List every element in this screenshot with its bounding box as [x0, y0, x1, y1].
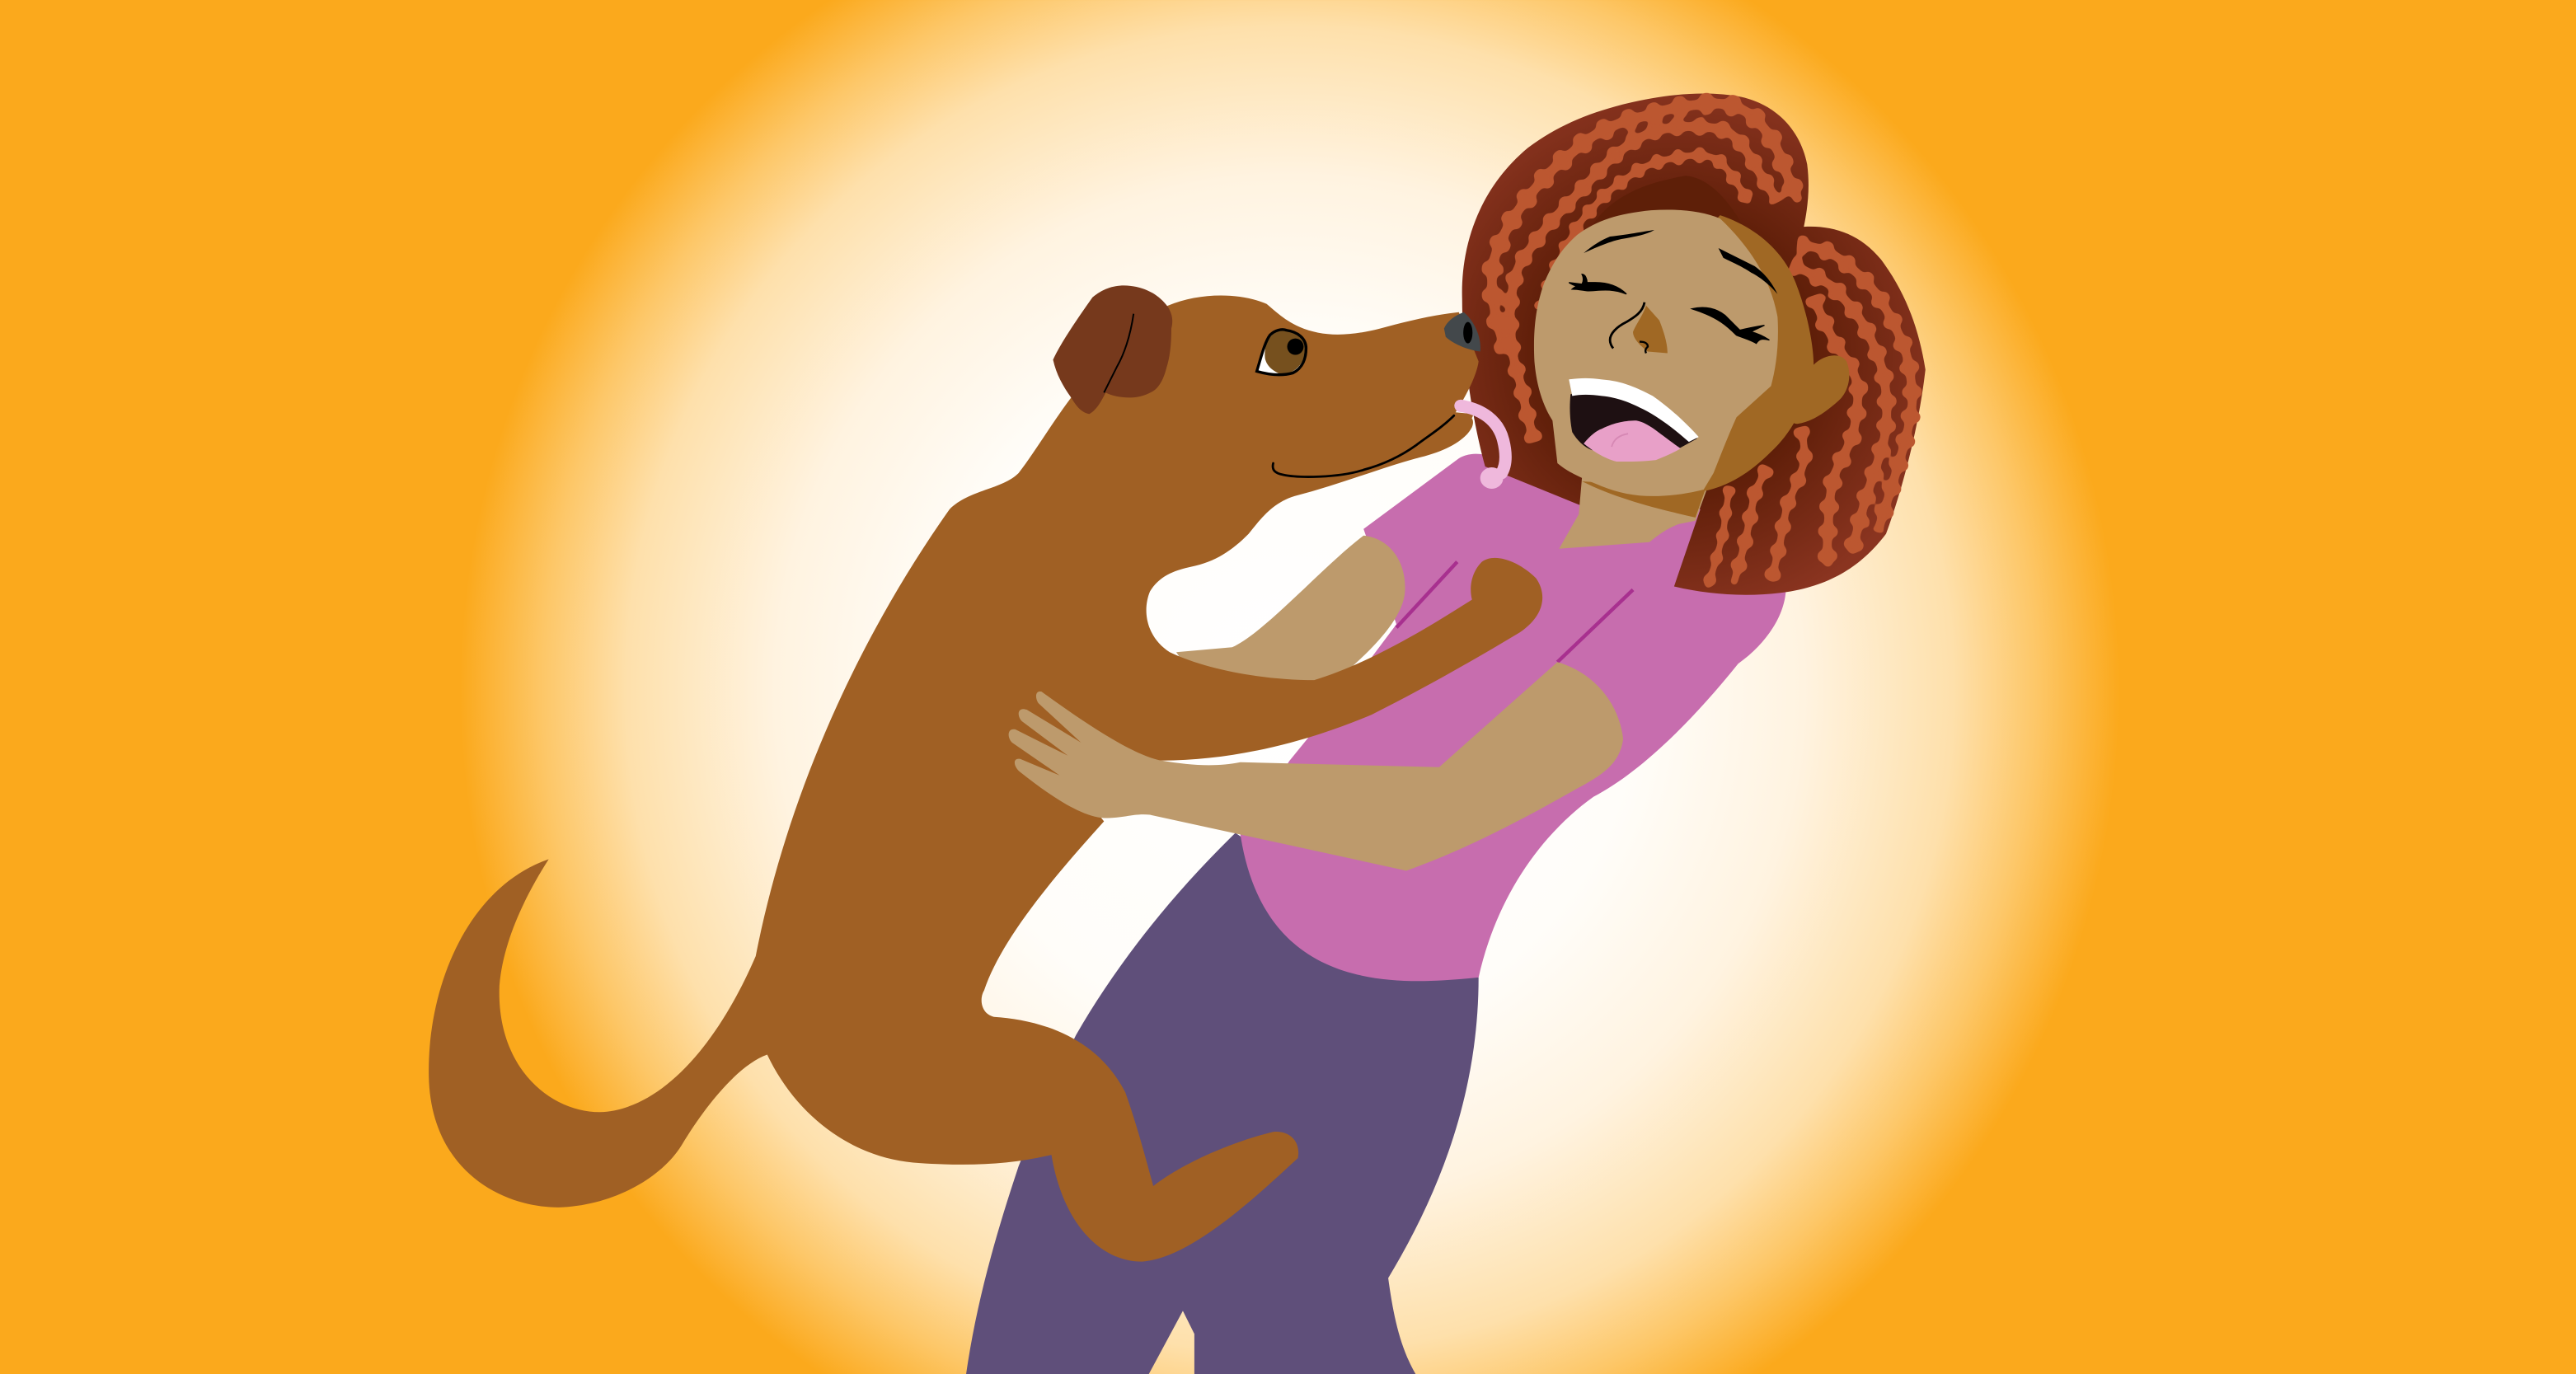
left eyebrow	[1584, 230, 1654, 253]
open mouth	[1569, 378, 1699, 462]
braid strand middle top	[1510, 126, 1777, 442]
eye white	[1257, 330, 1306, 375]
tongue tip	[1480, 467, 1504, 489]
nostril	[1640, 342, 1648, 354]
nose crease	[1610, 302, 1645, 349]
woman: purple trousers	[966, 832, 1479, 1374]
dog nose	[1444, 312, 1480, 352]
shirt fold line right	[1557, 590, 1633, 662]
braid strands right lobe	[1707, 245, 1912, 589]
dog ear	[1053, 285, 1172, 414]
iris	[1265, 331, 1306, 374]
left closed eye	[1569, 274, 1626, 294]
woman: near arm and hand	[1009, 662, 1623, 870]
dog ear crease	[1104, 314, 1133, 392]
teeth	[1569, 378, 1699, 442]
dog body	[429, 296, 1542, 1262]
woman: braided hair	[1462, 93, 1926, 595]
right eyebrow	[1719, 248, 1777, 294]
tongue	[1584, 420, 1681, 462]
woman: face	[1534, 209, 1778, 496]
braid strand inner top	[1541, 155, 1750, 311]
shirt fold line left	[1396, 562, 1457, 627]
eye outline	[1257, 330, 1306, 375]
hair mass	[1462, 93, 1926, 595]
tongue crease	[1612, 434, 1628, 447]
dog tongue	[1461, 406, 1505, 473]
right closed eye	[1692, 307, 1769, 344]
lower jaw overlay	[1413, 415, 1473, 458]
dog nostril	[1463, 322, 1472, 344]
woman: head shaded side	[1643, 215, 1814, 491]
braid strand outer top	[1492, 104, 1799, 352]
dog	[429, 285, 1542, 1262]
dog eye	[1257, 330, 1306, 375]
woman: far upper arm	[1176, 536, 1405, 698]
pupil	[1288, 339, 1303, 355]
woman: pink shirt	[1241, 454, 1785, 981]
woman: neck shadow	[1582, 481, 1706, 518]
dark hairline	[1593, 176, 1742, 223]
woman: nose	[1633, 306, 1668, 354]
mouth interior	[1570, 388, 1697, 450]
braid strands	[1492, 104, 1912, 589]
dog mouth line	[1273, 415, 1454, 476]
woman: ear	[1787, 355, 1849, 424]
woman: neck	[1559, 476, 1709, 549]
woman	[966, 93, 1926, 1374]
